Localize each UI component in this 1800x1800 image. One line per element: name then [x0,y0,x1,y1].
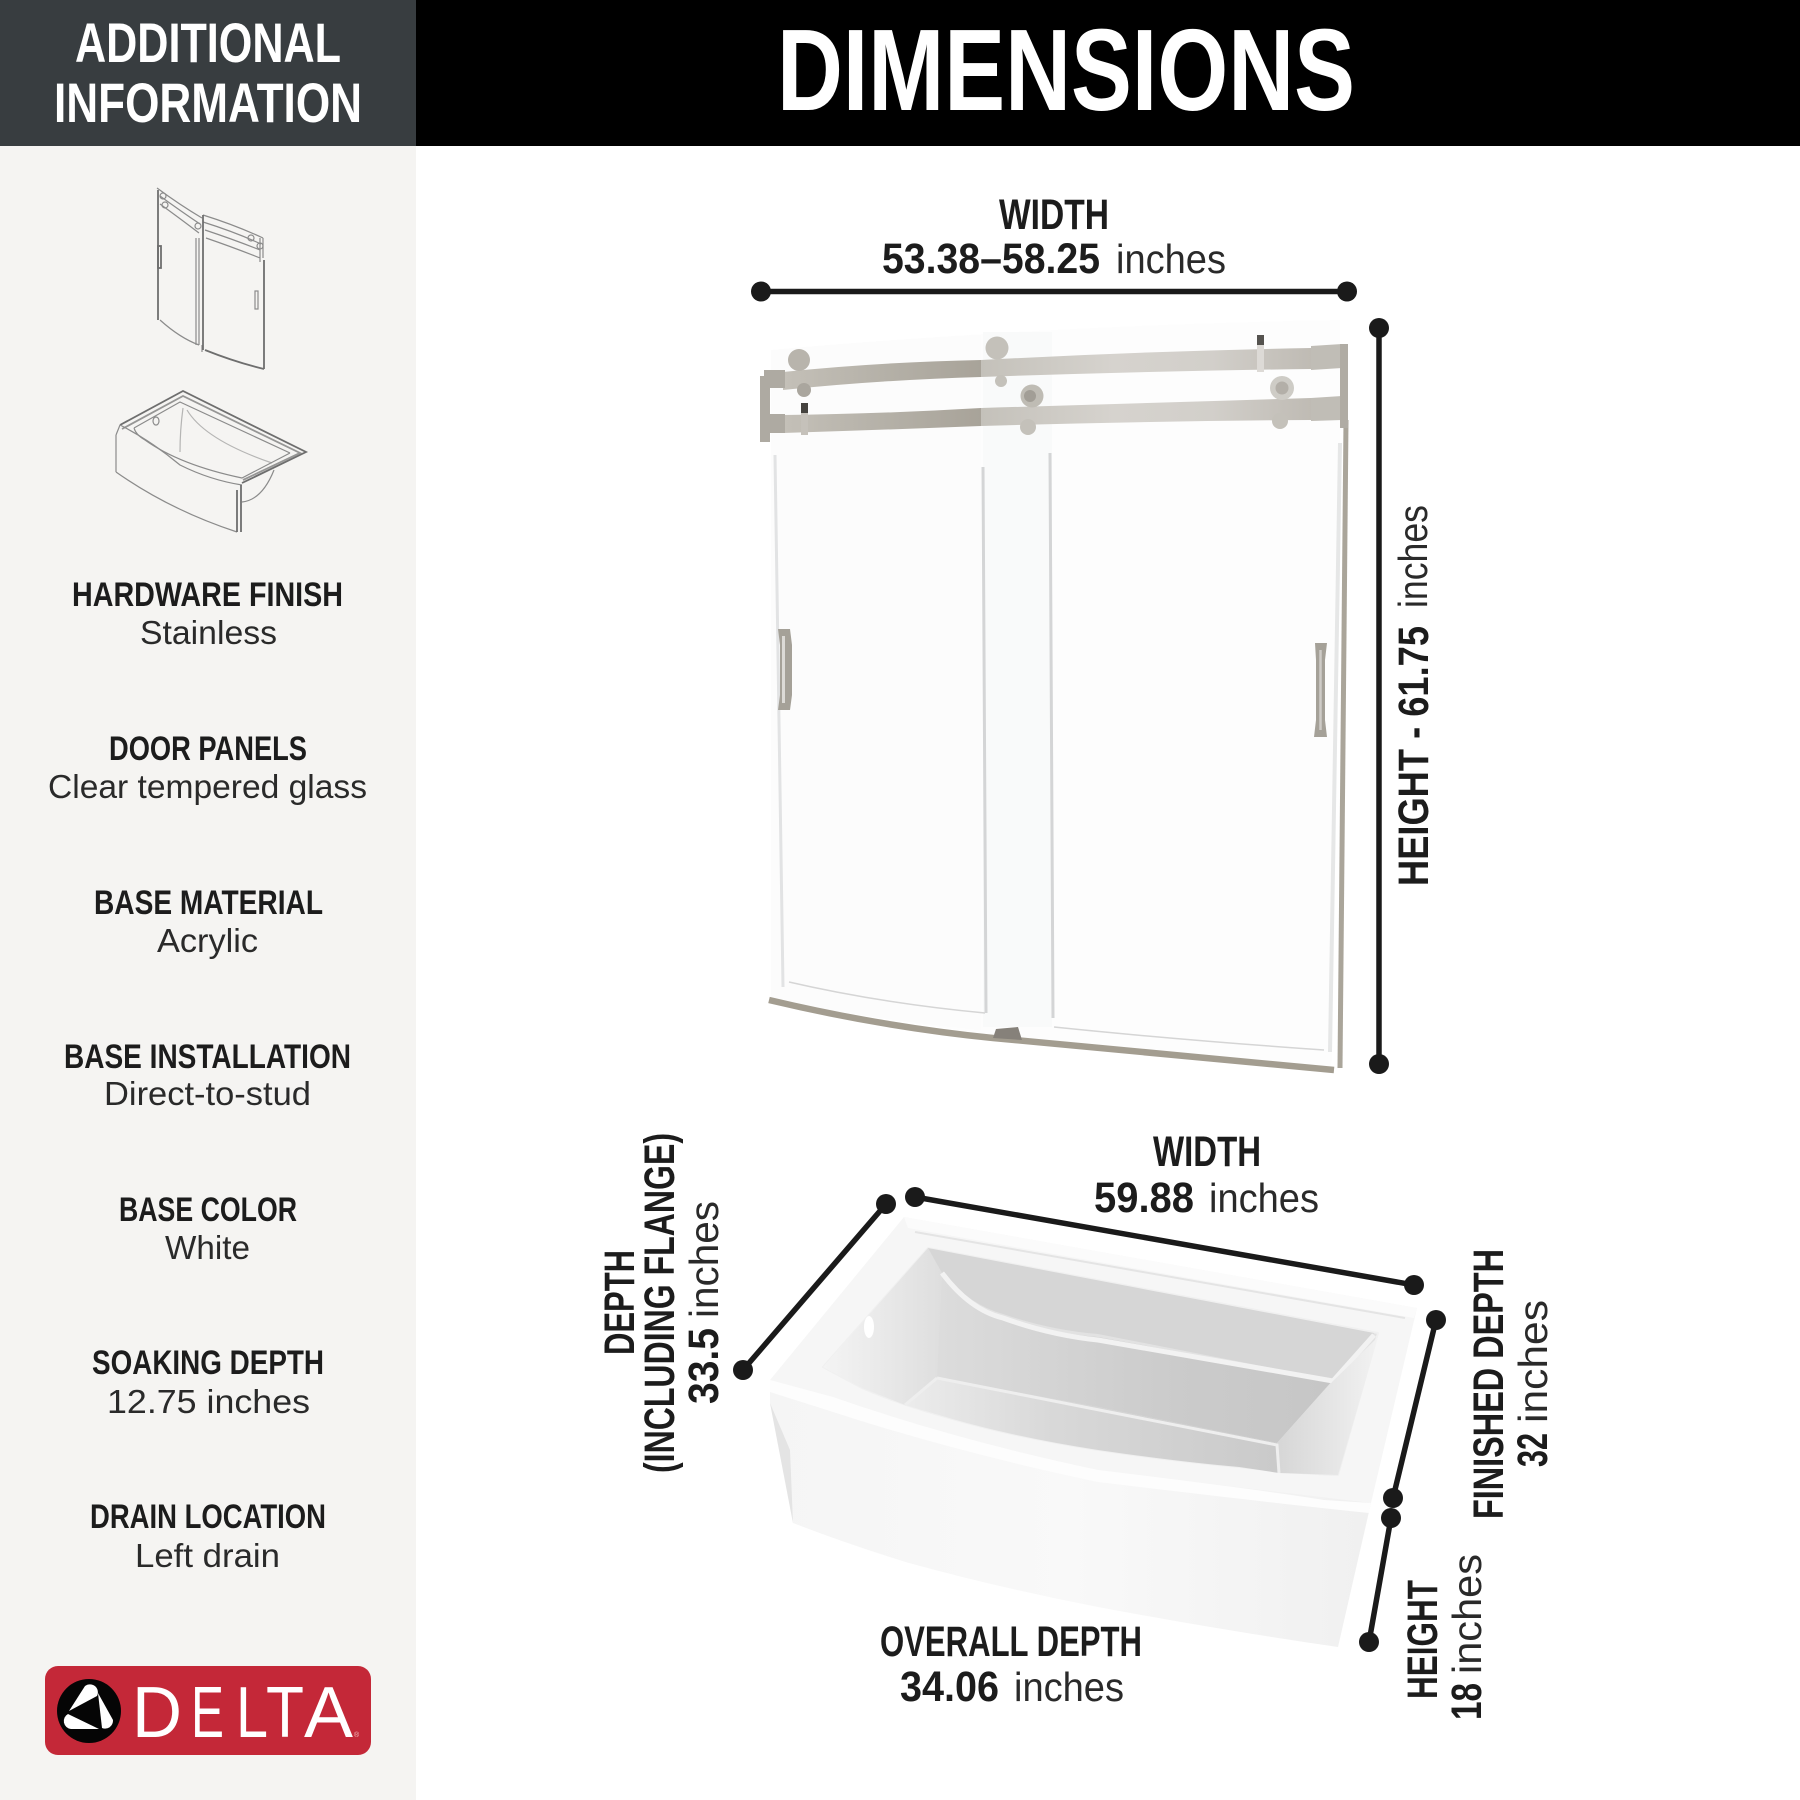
dimension: door width label: inches [1116,236,1226,282]
spec: soaking depth: SOAKING DEPTH [92,1344,324,1382]
header: dimensions: DIMENSIONS [777,5,1355,135]
logo: Delta [45,1666,371,1755]
logo: Delta: E [191,1673,224,1753]
logo: Delta: ® [354,1731,360,1739]
right bracket [1311,344,1342,370]
dimension: overall depth label: OVERALL DEPTH [880,1618,1142,1666]
spec: drain location [90,1498,326,1574]
bottom guide [993,1027,1022,1040]
bumpers [1257,345,1264,372]
header: additional information: ADDITIONAL [75,11,341,74]
dimension: tub height label [1399,1554,1491,1720]
basin [823,1248,1378,1475]
dimension: depth including flange label: inches [681,1201,727,1318]
upper bar [783,360,981,390]
dimension: door width label: WIDTH [999,191,1109,239]
rollers [788,336,1294,435]
icon: tub line drawing [116,391,306,532]
spec: hardware finish: HARDWARE FINISH [72,576,343,614]
spec: hardware finish: Stainless [140,614,277,651]
left bracket [760,370,785,442]
dimension line: door width [751,282,1357,302]
dimension: depth including flange label: 33.5 [680,1328,728,1404]
spec: base material: Acrylic [157,922,258,959]
spec: base installation: Direct-to-stud [104,1075,311,1112]
spec: door panels [48,730,367,805]
header: dimensions [416,0,1800,146]
spec: soaking depth: 12.75 inches [107,1383,310,1420]
lumbar ledge highlight [942,1273,1333,1381]
dimension line: finished depth [1383,1310,1446,1508]
basin front wall [905,1378,1279,1473]
spec: drain location: Left drain [135,1537,280,1574]
spec: base installation: BASE INSTALLATION [64,1038,351,1076]
dimension line: tub height [1359,1508,1401,1652]
logo: Delta: L [236,1673,268,1753]
panel: additional information sidebar [0,0,416,1800]
basin upper ledge [928,1248,1374,1380]
spec: door panels: DOOR PANELS [109,730,307,768]
dimension line: tub width [905,1187,1424,1295]
overflow drain [864,1316,874,1338]
dimension: overall depth label: 34.06 [900,1663,999,1711]
dimension: depth including flange label: DEPTH [596,1250,644,1355]
basin left wall [823,1248,942,1405]
dimension: overall depth label: inches [1014,1664,1124,1710]
spec: base installation [64,1038,351,1112]
lower bar [783,408,981,433]
spec: drain location: DRAIN LOCATION [90,1498,326,1536]
spec: hardware finish [72,576,343,651]
tub rim [770,1217,1417,1503]
dimension: tub width label: inches [1209,1175,1319,1221]
logo: Delta: A [304,1673,353,1753]
dimension: depth including flange label [596,1133,728,1473]
spec: soaking depth [92,1344,324,1420]
spec: base color: BASE COLOR [119,1191,297,1229]
right metal channel [1340,420,1346,1068]
dimension: overall depth label [880,1618,1142,1711]
dimension: door width label [882,191,1226,283]
dimension: finished depth label: inches [1510,1300,1556,1423]
floor edge highlight [905,1378,1279,1473]
basin back wall and floor [937,1273,1333,1443]
spec: base material: BASE MATERIAL [94,884,323,922]
door handles [778,629,792,710]
dimension: door height label: inches [1390,505,1436,608]
image: sliding glass shower door [760,320,1348,1070]
icon: door line drawing [157,188,264,369]
dimension: finished depth label: 32 [1509,1433,1557,1467]
dimension: depth including flange label: (INCLUDING FLANGE) [636,1133,684,1473]
dimension: finished depth label: FINISHED DEPTH [1465,1249,1513,1519]
header: additional information [0,0,416,146]
dimension line: depth including flange [733,1194,896,1380]
spec: base color [119,1191,297,1266]
dimension: tub width label: WIDTH [1153,1128,1261,1176]
dimension line: door height [1369,318,1389,1074]
dimension: door height label: HEIGHT - 61.75 [1390,626,1438,886]
apron [770,1380,1371,1647]
spec: base material [94,884,323,959]
header: additional information: INFORMATION [54,71,362,134]
door glass [771,320,1340,1068]
dimension: tub width label [1094,1128,1319,1222]
dimension: tub height label: 18 [1443,1683,1491,1720]
dimension: tub width label: 59.88 [1094,1174,1194,1222]
side flange [770,1403,793,1523]
logo: Delta: T [266,1673,304,1753]
bottom track [769,1000,1334,1070]
image: bathtub [770,1217,1417,1647]
dimension: finished depth label [1465,1249,1557,1519]
dimension: tub height label: HEIGHT [1399,1580,1447,1699]
spec: door panels: Clear tempered glass [48,768,367,805]
dimension: door width label: 53.38–58.25 [882,235,1100,283]
basin end wall [1277,1337,1378,1475]
logo: Delta: D [132,1673,182,1753]
spec: base color: White [165,1229,250,1266]
dimension: tub height label: inches [1444,1554,1490,1674]
